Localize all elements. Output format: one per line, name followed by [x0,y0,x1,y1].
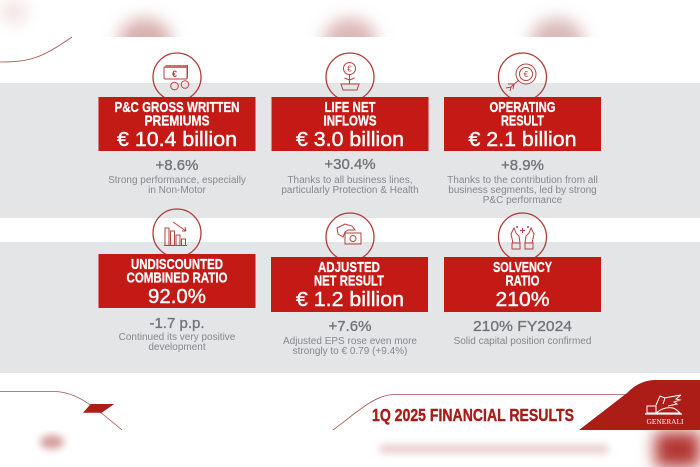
panel: Undiscounted combined ratio [98,209,256,353]
heading: ADJUSTED [318,259,380,276]
red title box [444,97,601,151]
panel: Undiscounted combined ratio: development [148,342,206,353]
grey background bands [0,83,700,373]
red title box [98,254,256,308]
icon: falling bar chart [153,209,201,257]
panel: Adjusted net result: strongly to € 0.79 (+9.4%) [293,346,407,357]
icon: hand with banknote [326,213,374,261]
blurred top backdrop [0,0,592,37]
heading: OPERATING [490,99,556,116]
red title box [98,97,256,151]
panel: Life net inflows: INFLOWS [324,112,376,130]
change: +8.6% [156,157,198,174]
value: € 3.0 billion [296,129,404,151]
value: € 2.1 billion [468,129,576,151]
heading: LIFE NET [324,99,376,116]
panel: Solvency ratio [444,213,601,347]
icon: target with arrow [498,53,546,101]
red title box [271,257,428,312]
red title box [444,257,601,312]
note: Thanks to all business lines, [287,175,413,186]
icon: hands protecting [498,213,546,261]
note: Strong performance, especially [108,175,246,186]
panel: Adjusted net result [271,213,428,357]
panel: Life net inflows: particularly Protection & Health [281,185,419,196]
red title box [272,97,428,151]
icon: banknote and coins [153,53,201,101]
panel: Adjusted net result: NET RESULT [314,272,384,290]
footer rule [333,394,628,430]
heading: SOLVENCY [493,259,552,276]
icon: plant with coin: € [347,64,352,74]
change: +7.6% [329,318,371,335]
panel: P&C gross written premiums [98,53,256,196]
panel: P&C gross written premiums: in Non-Motor [148,185,207,196]
icon: target with arrow: € [524,70,529,79]
panel: P&C gross written premiums: PREMIUMS [144,112,210,130]
value: € 10.4 billion [117,129,237,151]
panel: Solvency ratio: RATIO [506,272,540,290]
change: -1.7 p.p. [149,315,205,332]
panel: Life net inflows [272,53,428,196]
blurred bottom backdrop [40,432,700,467]
panel: Undiscounted combined ratio: COMBINED RATIO [126,270,228,286]
decorative curve and parallelogram bottom left [0,392,122,430]
panel: Operating result: RESULT [501,112,544,130]
note: Adjusted EPS rose even more [283,336,417,347]
note: Continued its very positive [119,332,236,343]
value: 92.0% [148,286,206,308]
footer red logo block [579,380,700,430]
value: € 1.2 billion [296,289,404,311]
panel: Operating result [444,53,601,206]
change: 210% FY2024 [473,318,572,335]
icon: plant with coin [326,53,374,101]
change: +8.9% [501,157,544,174]
logo: Generali lion [645,395,684,426]
note: Solid capital position confirmed [454,336,591,347]
change: +30.4% [324,156,376,173]
value: 210% [496,289,550,311]
logo wordmark: GENERALI [646,417,684,426]
footer title: 1Q 2025 FINANCIAL RESULTS [372,405,574,425]
icon: banknote and coins: € [172,69,177,79]
note: Thanks to the contribution from all [447,175,598,186]
decorative curve top left [0,37,72,62]
heading: P&C GROSS WRITTEN [114,99,240,116]
panel: Operating result: business segments, led by strong [448,185,597,196]
heading: UNDISCOUNTED [131,256,223,273]
panel: Operating result: P&C performance [483,195,563,206]
